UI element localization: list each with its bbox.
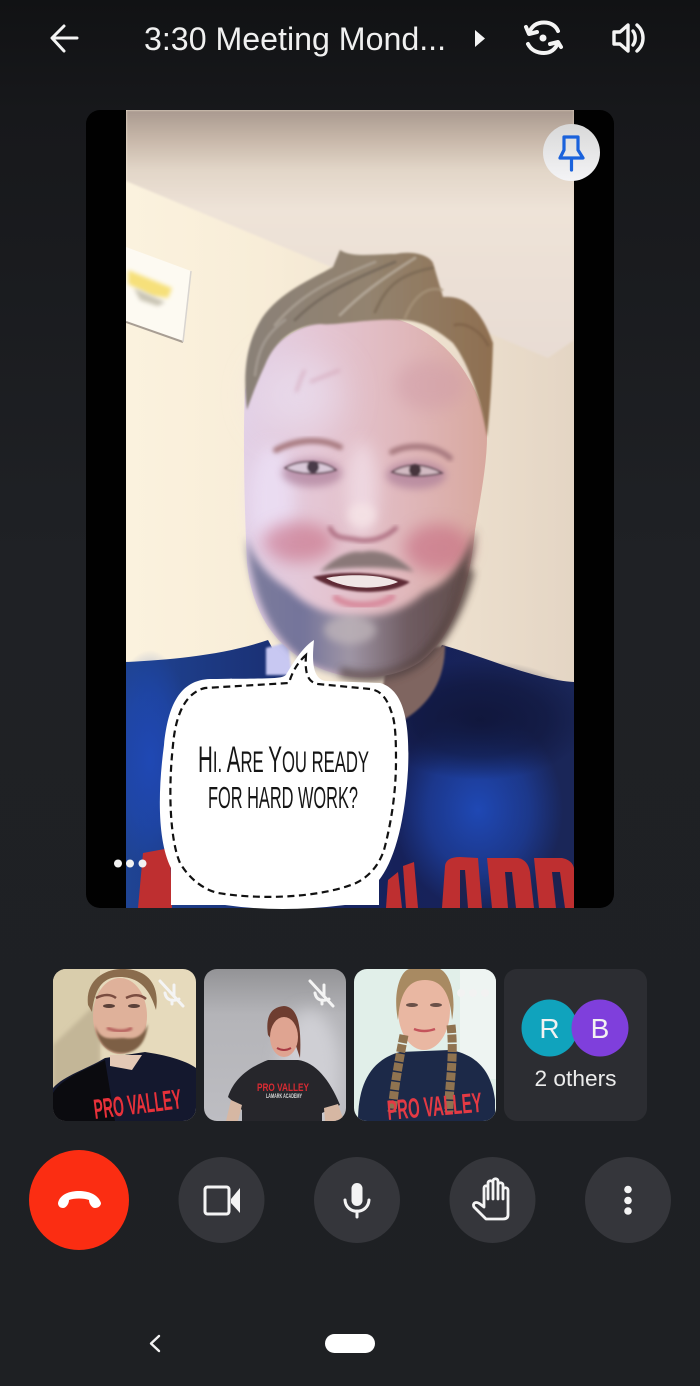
icon: thumbnail options dots	[457, 989, 489, 997]
nose highlight	[346, 442, 378, 538]
hair strands	[255, 258, 488, 375]
chin highlight	[324, 616, 376, 644]
button: more options	[585, 1157, 671, 1243]
navigation bar	[151, 1334, 375, 1353]
left cheek highlight	[250, 445, 294, 555]
forehead scar	[296, 370, 340, 392]
shirt	[126, 640, 574, 908]
icon: speaker	[614, 25, 643, 51]
icon: home pill	[325, 1334, 375, 1353]
others label: 2 others	[534, 1066, 616, 1091]
button: hang up	[29, 1150, 129, 1250]
icon: switch camera	[526, 22, 561, 53]
button: raise hand	[450, 1157, 536, 1243]
bubble text line 1: HI. ARE YOU READY	[198, 739, 369, 780]
framed picture	[126, 247, 191, 342]
panel: call controls	[29, 1150, 671, 1250]
callout: speech bubble	[160, 640, 408, 909]
thumbnail: woman with braids: PRO VALLEY	[386, 1087, 483, 1126]
nose	[330, 503, 396, 540]
beard	[246, 528, 476, 677]
thumbnail: woman with braids	[354, 969, 496, 1126]
photo: man smiling	[105, 110, 590, 910]
thumbnail: woman far from camera	[204, 969, 346, 1130]
video letterbox	[86, 110, 614, 908]
thumbnail: woman far from camera: PRO VALLEY	[257, 1082, 309, 1094]
room ceiling	[126, 110, 574, 358]
thumbnail: young man	[53, 969, 196, 1125]
icon: muted mic 2	[310, 981, 333, 1006]
avatar B: B	[591, 1013, 609, 1044]
eyes	[285, 461, 442, 476]
button: microphone	[314, 1157, 400, 1243]
head	[244, 315, 487, 677]
bubble text line 2: FOR HARD WORK?	[208, 780, 358, 815]
brows	[276, 441, 450, 458]
icon: muted mic 1	[160, 981, 183, 1006]
icon: expand triangle	[475, 30, 485, 47]
icon: back arrow	[52, 26, 77, 51]
brow band shading	[398, 364, 455, 406]
avatar B	[572, 1000, 628, 1056]
thumbnail: young man: PRO VALLEY	[92, 1083, 183, 1125]
tile: 2 others	[504, 969, 647, 1121]
shirt highlights	[126, 653, 570, 904]
hair	[245, 250, 493, 437]
cheeks	[262, 522, 472, 572]
icon: nav back chevron	[151, 1336, 159, 1351]
avatar R	[522, 1000, 578, 1056]
meeting title: 3:30 Meeting Mond...	[144, 21, 446, 57]
eye shadows	[282, 459, 446, 489]
neck	[266, 642, 445, 722]
shirt logo lettering	[138, 848, 574, 908]
button: camera	[178, 1157, 264, 1243]
mustache	[320, 551, 414, 572]
beard dark edge	[340, 570, 470, 677]
forehead highlight	[269, 358, 346, 432]
panel: main video tile	[86, 110, 614, 910]
bubble shape	[160, 640, 408, 909]
avatar R: R	[539, 1013, 560, 1044]
icon: pin button	[543, 124, 600, 181]
top app bar	[52, 21, 643, 57]
icon: tile options dots	[114, 860, 146, 868]
bubble dashed outline	[170, 655, 396, 897]
thumbnail: woman far from camera: LAMARK ACADEMY	[266, 1094, 302, 1100]
mouth	[313, 573, 410, 605]
panel: participant thumbnails	[53, 969, 647, 1130]
